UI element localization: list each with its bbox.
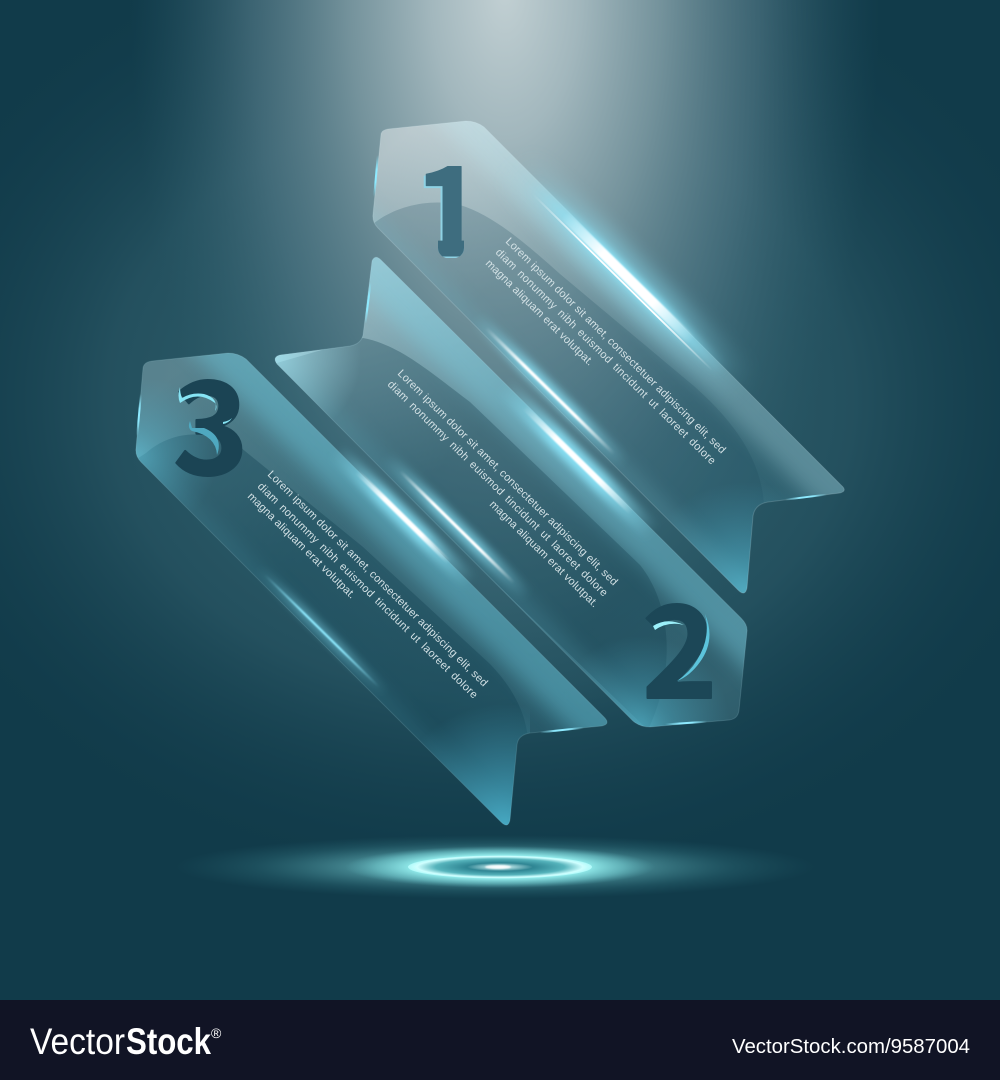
streak: panel 2 top edge <box>496 379 660 541</box>
tail glints <box>136 155 827 733</box>
text block 3: Lorem ipsum dolor sit amet, consectetuer adipiscing elit, sed <box>265 469 490 689</box>
text block 2: diam nonummy nibh euismod tincidunt ut laoreet dolore <box>385 379 610 599</box>
number 1: 1 <box>413 112 486 292</box>
streak: panel 2 lower edge <box>381 452 533 602</box>
number 1 <box>424 166 464 258</box>
footer logo <box>30 1021 222 1062</box>
number 2: 2 <box>642 550 718 735</box>
text block 2: Lorem ipsum dolor sit amet, consectetuer adipiscing elit, sed <box>395 368 620 588</box>
footer image id: VectorStock.com/9587004 <box>732 1036 970 1058</box>
streak: panel 1 lower edge <box>470 312 630 470</box>
panel 2 <box>274 257 748 728</box>
streak: panel 1 top edge <box>500 152 756 404</box>
footer logo: Vector <box>30 1021 125 1062</box>
text block 1: diam nonummy nibh euismod tincidunt ut laoreet dolore <box>493 247 718 467</box>
panel 3 <box>136 352 608 826</box>
footer logo: Stock <box>126 1021 211 1062</box>
streak: panel 3 lower edge <box>254 564 390 698</box>
streak: panel 3 top edge <box>329 444 477 590</box>
footer logo: ® <box>211 1025 222 1041</box>
text block 1: magna aliquam erat volutpat. <box>483 258 596 368</box>
number 3: 3 <box>173 326 249 511</box>
number 1: 1 <box>411 114 484 294</box>
text block 1: Lorem ipsum dolor sit amet, consectetuer adipiscing elit, sed <box>503 236 728 456</box>
text block 3: magna aliquam erat volutpat. <box>245 491 358 601</box>
footer bar <box>0 1000 1000 1080</box>
floor light ring <box>175 835 815 899</box>
panel 1 <box>372 120 845 594</box>
text block 3: diam nonummy nibh euismod tincidunt ut laoreet dolore <box>255 481 480 701</box>
text block 2: magna aliquam erat volutpat. <box>487 499 600 610</box>
light streaks <box>136 152 827 733</box>
